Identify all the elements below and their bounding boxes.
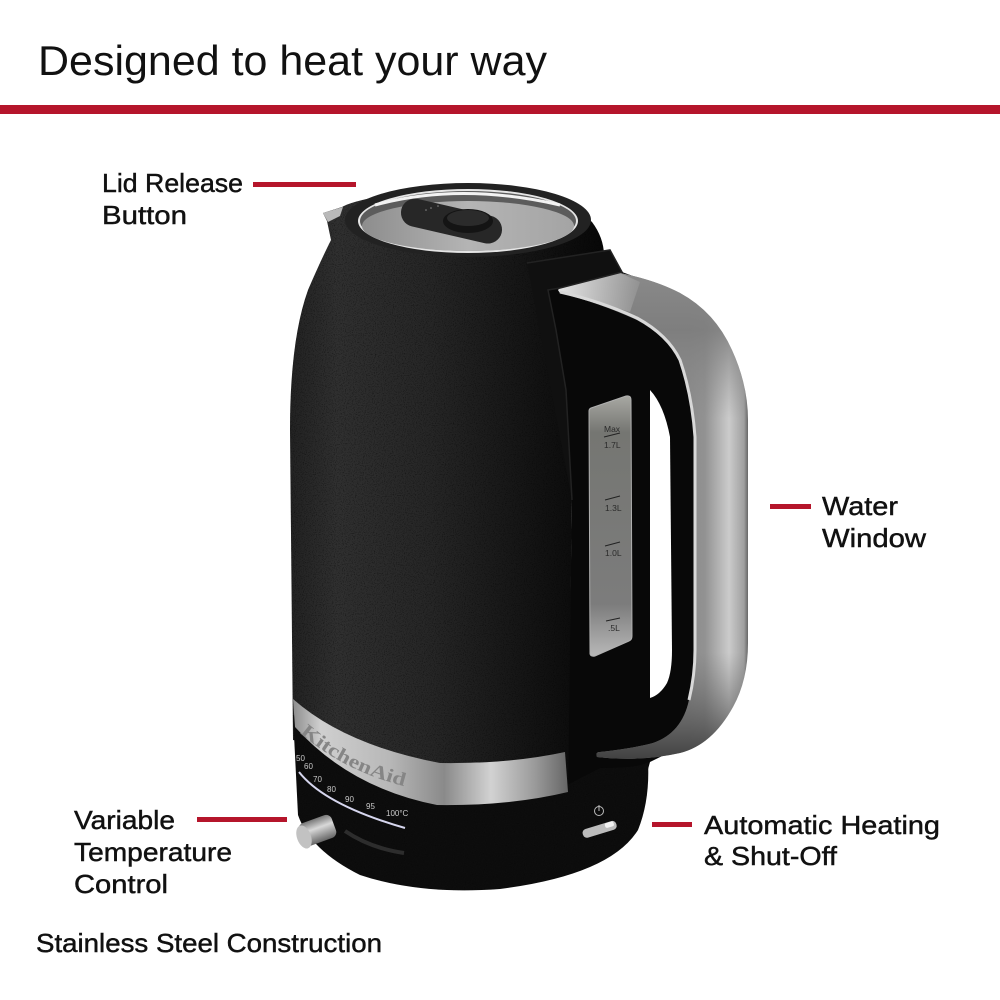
temperature scale: 60 — [304, 762, 313, 771]
temperature knob — [293, 813, 338, 851]
label: lid release button: Button — [102, 200, 187, 230]
label: automatic heating and shut-off: & Shut-Off — [704, 841, 838, 871]
water window: 1.3L — [605, 503, 622, 513]
label: automatic heating and shut-off: Automatic Heating — [704, 810, 940, 840]
label: variable temperature control: Temperature — [74, 837, 232, 867]
title: Designed to heat your way — [38, 37, 547, 84]
temperature scale: 90 — [345, 795, 354, 804]
label: lid release button — [102, 168, 356, 230]
handle collar edge — [527, 250, 622, 500]
label: variable temperature control: Control — [74, 869, 168, 899]
water window: Max — [604, 424, 621, 434]
kettle illustration — [290, 183, 748, 890]
water window: 1.7L — [604, 440, 621, 450]
stainless band: KitchenAid — [300, 724, 406, 786]
red header rule — [0, 105, 1000, 114]
label: variable temperature control: Variable — [74, 805, 175, 835]
lid release button — [398, 196, 505, 246]
lid — [345, 183, 591, 257]
temperature scale: 70 — [313, 775, 322, 784]
temperature scale — [293, 754, 409, 853]
spout lip — [323, 207, 343, 222]
water window — [589, 396, 632, 656]
handle: black backing and grip — [527, 250, 738, 800]
water window: 1.0L — [605, 548, 622, 558]
label: lid release button: Lid Release — [102, 168, 243, 198]
temperature scale: 100°C — [386, 809, 409, 818]
temperature scale: 50 — [296, 754, 305, 763]
label: water window — [770, 491, 926, 553]
water window: .5L — [608, 623, 620, 633]
power button — [582, 805, 618, 839]
temperature scale: 95 — [366, 802, 375, 811]
temperature scale: 80 — [327, 785, 336, 794]
label: variable temperature control — [74, 805, 287, 899]
label: water window: Window — [822, 523, 926, 553]
kettle body — [290, 184, 604, 800]
label: water window: Water — [822, 491, 898, 521]
handle: stainless outer — [558, 273, 748, 759]
stainless band — [293, 699, 568, 806]
handle: opening — [650, 390, 672, 698]
base — [293, 715, 648, 890]
label: stainless steel construction: Stainless Steel Construction — [36, 928, 382, 958]
label: automatic heating and shut-off — [652, 810, 940, 871]
